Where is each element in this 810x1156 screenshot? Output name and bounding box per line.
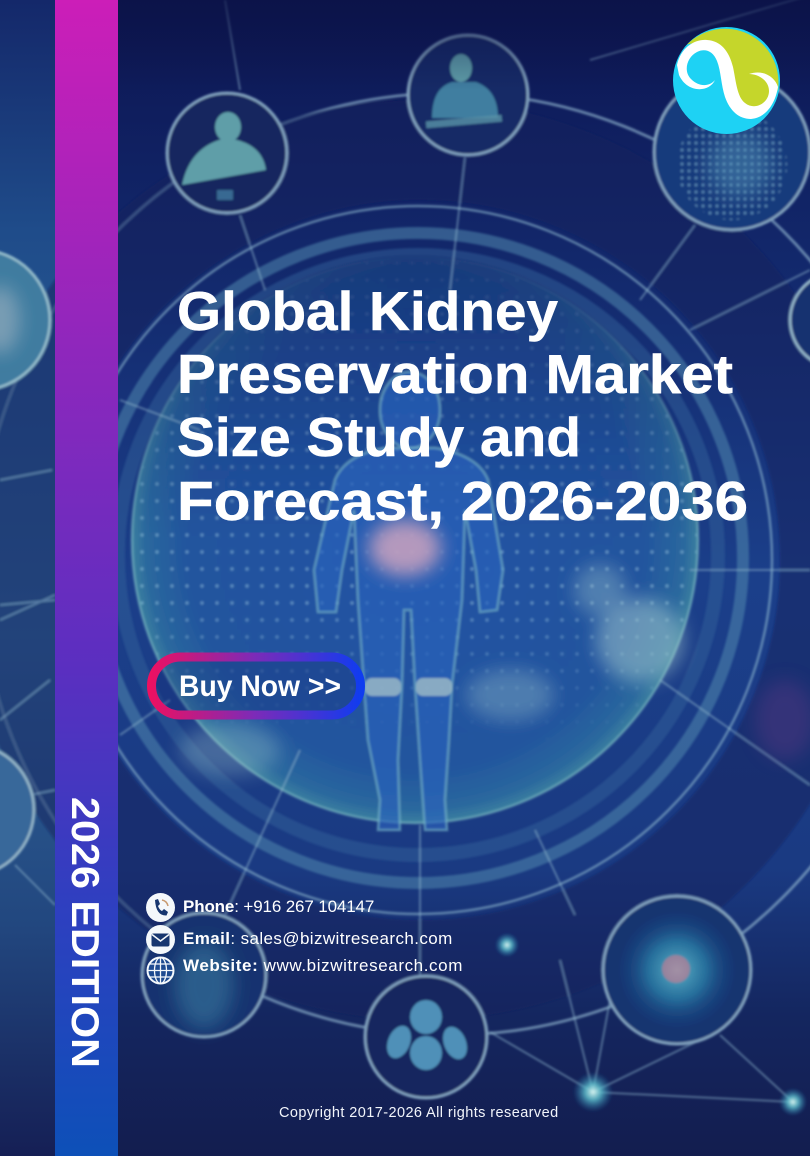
icon: email (146, 925, 175, 954)
title: Size Study and (177, 406, 581, 468)
top shade (118, 0, 810, 90)
icon: phone (146, 893, 175, 922)
node: lower left (142, 913, 266, 1037)
edition label: 2026 EDITION (63, 797, 106, 1068)
human figure (314, 372, 503, 830)
node: doctor (408, 35, 528, 155)
contact block (146, 893, 463, 984)
node: left upper (0, 250, 50, 390)
pelvis glow (369, 520, 441, 576)
title: Global Kidney (177, 280, 558, 342)
knee highlights (365, 678, 452, 696)
dark band (10, 150, 810, 970)
buy now button (147, 652, 365, 720)
side bar with edition label (55, 0, 118, 1156)
node: team (365, 976, 487, 1098)
title (177, 280, 748, 532)
continents (180, 564, 684, 776)
title: Preservation Market (177, 343, 733, 405)
email text: Email: sales@bizwitresearch.com (183, 929, 453, 948)
node: right edge (790, 272, 810, 368)
node: person (167, 93, 287, 213)
node: left lower (0, 744, 34, 876)
logo (673, 27, 780, 134)
icon: globe (146, 956, 174, 984)
concentric rings (64, 206, 772, 914)
globe (132, 257, 698, 823)
copyright: Copyright 2017-2026 All rights researved (279, 1105, 559, 1121)
purple haze right (755, 680, 810, 760)
node: fingerprint (654, 74, 810, 230)
upper globe shade (130, 255, 700, 825)
node: glowing chip (603, 896, 751, 1044)
glowing points (495, 933, 807, 1116)
website text: Website: www.bizwitresearch.com (183, 956, 463, 975)
buy now button: Buy Now >> (179, 670, 341, 703)
title: Forecast, 2026-2036 (177, 470, 748, 532)
phone text: Phone: +916 267 104147 (183, 897, 374, 916)
